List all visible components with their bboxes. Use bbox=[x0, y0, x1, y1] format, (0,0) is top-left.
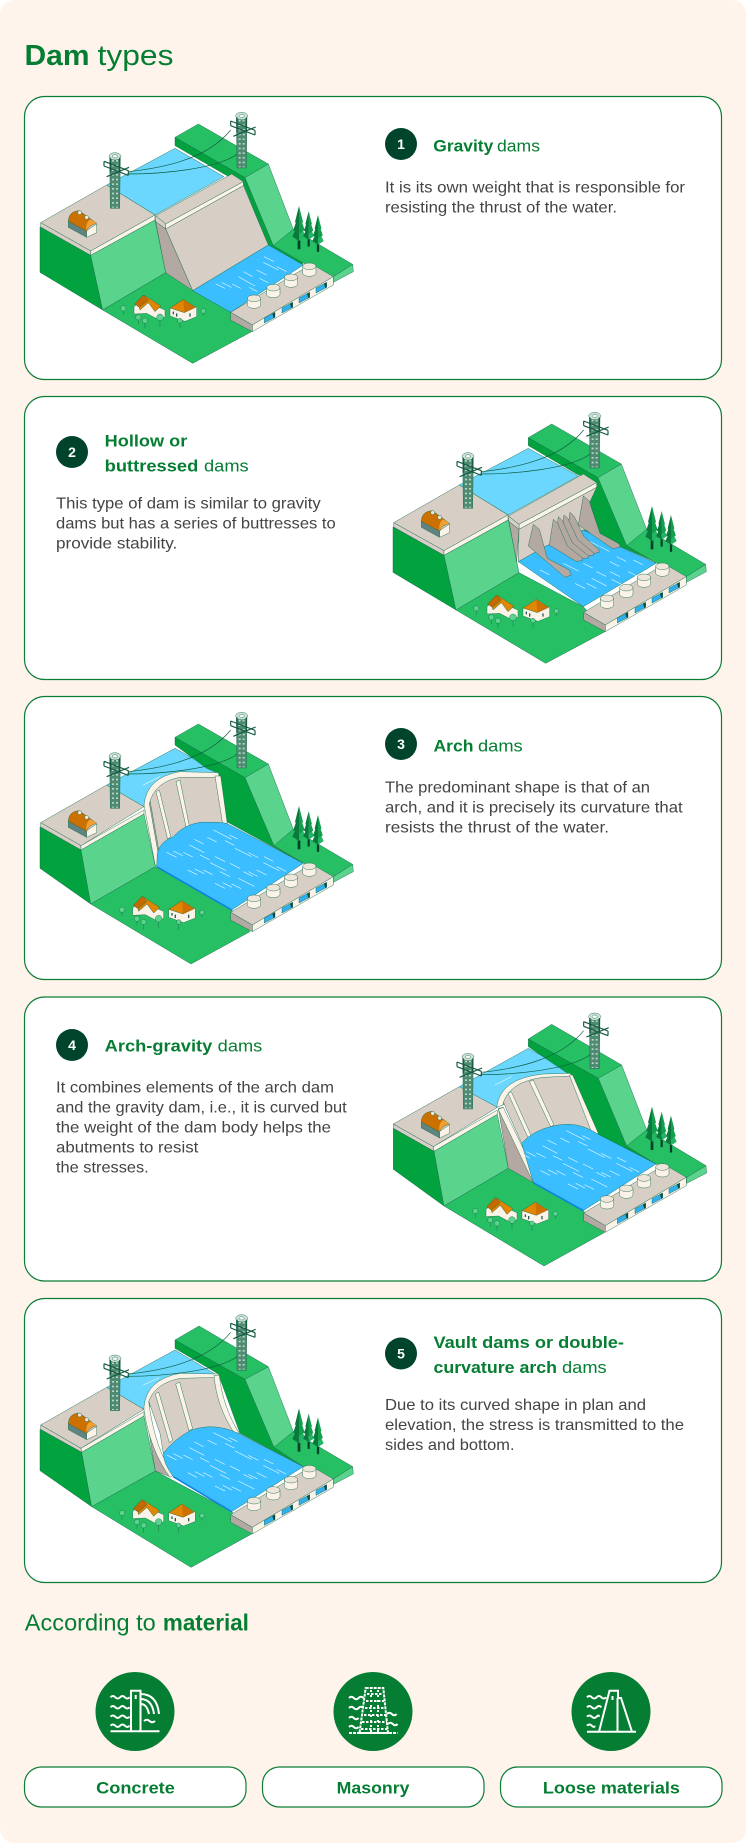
heading: dams bbox=[204, 456, 249, 475]
button: masonry bbox=[262, 1767, 484, 1807]
body text bbox=[56, 495, 336, 552]
body text: dams but has a series of buttresses to bbox=[56, 515, 336, 532]
body text bbox=[385, 780, 683, 836]
heading: Arch bbox=[434, 736, 474, 756]
body text: Due to its curved shape in plan and bbox=[385, 1397, 646, 1414]
body text: the stresses. bbox=[56, 1160, 149, 1177]
heading bbox=[433, 136, 540, 156]
body text: elevation, the stress is transmitted to the bbox=[385, 1417, 684, 1434]
body text: It combines elements of the arch dam bbox=[56, 1080, 334, 1097]
number badge 2: 2 bbox=[68, 444, 76, 460]
heading bbox=[105, 432, 249, 475]
number badge 2 bbox=[56, 436, 88, 468]
number badge 1 bbox=[385, 128, 417, 160]
button: concrete bbox=[24, 1767, 246, 1807]
body text: the weight of the dam body helps the bbox=[56, 1120, 331, 1137]
section heading: according to material: According to bbox=[25, 1610, 156, 1636]
body text: abutments to resist bbox=[56, 1140, 199, 1157]
heading: dams bbox=[497, 136, 540, 156]
section heading: according to material: material bbox=[163, 1610, 249, 1636]
heading: curvature arch bbox=[434, 1358, 557, 1377]
illustration: arch dam bbox=[40, 712, 353, 964]
button: loose materials: Loose materials bbox=[543, 1778, 680, 1797]
body text: This type of dam is similar to gravity bbox=[56, 495, 321, 512]
illustration: gravity dam bbox=[40, 112, 353, 363]
heading: buttressed bbox=[105, 456, 198, 475]
button: masonry: Masonry bbox=[337, 1778, 410, 1797]
title: Dam bbox=[24, 40, 90, 72]
heading: Hollow or bbox=[105, 432, 188, 451]
illustration: vault dam bbox=[40, 1315, 353, 1567]
body text: and the gravity dam, i.e., it is curved but bbox=[56, 1100, 347, 1117]
panel: buttressed dams bbox=[24, 396, 722, 680]
number badge 5: 5 bbox=[397, 1346, 405, 1362]
number badge 4 bbox=[56, 1029, 88, 1061]
title bbox=[24, 40, 174, 72]
body text: sides and bottom. bbox=[385, 1437, 514, 1454]
body text: arch, and it is precisely its curvature that bbox=[385, 800, 683, 816]
icon: concrete dam bbox=[96, 1672, 174, 1751]
number badge 5 bbox=[385, 1338, 417, 1370]
number badge 3: 3 bbox=[397, 736, 405, 752]
body text bbox=[56, 1080, 347, 1177]
number badge 1: 1 bbox=[397, 136, 405, 152]
heading: Arch-gravity bbox=[105, 1037, 213, 1056]
body text: The predominant shape is that of an bbox=[385, 780, 650, 796]
button: concrete: Concrete bbox=[96, 1778, 175, 1797]
illustration: buttressed dam bbox=[393, 412, 706, 663]
body text: resists the thrust of the water. bbox=[385, 820, 609, 836]
panel: gravity dams bbox=[24, 96, 722, 380]
heading: Vault dams or double- bbox=[434, 1333, 624, 1352]
section heading: according to material bbox=[25, 1610, 249, 1636]
number badge 4: 4 bbox=[68, 1037, 76, 1053]
heading: Gravity bbox=[433, 136, 494, 156]
illustration: arch-gravity dam bbox=[393, 1013, 707, 1266]
heading: dams bbox=[562, 1358, 607, 1377]
title: types bbox=[98, 40, 174, 72]
body text: It is its own weight that is responsible for bbox=[385, 180, 686, 196]
body text: resisting the thrust of the water. bbox=[385, 200, 617, 216]
panel: vault dams bbox=[24, 1298, 722, 1582]
number badge 3 bbox=[385, 728, 417, 760]
button: loose materials bbox=[500, 1767, 722, 1807]
panel: arch dams bbox=[24, 696, 722, 980]
heading bbox=[105, 1037, 262, 1056]
body text bbox=[385, 180, 686, 216]
body text: provide stability. bbox=[56, 535, 177, 552]
icon: loose materials dam bbox=[572, 1672, 650, 1751]
body text bbox=[385, 1397, 684, 1454]
icon: masonry dam bbox=[334, 1672, 412, 1751]
heading: dams bbox=[478, 736, 523, 756]
heading bbox=[434, 736, 523, 756]
heading bbox=[434, 1333, 624, 1377]
panel: arch-gravity dams bbox=[24, 997, 722, 1281]
heading: dams bbox=[218, 1037, 262, 1056]
